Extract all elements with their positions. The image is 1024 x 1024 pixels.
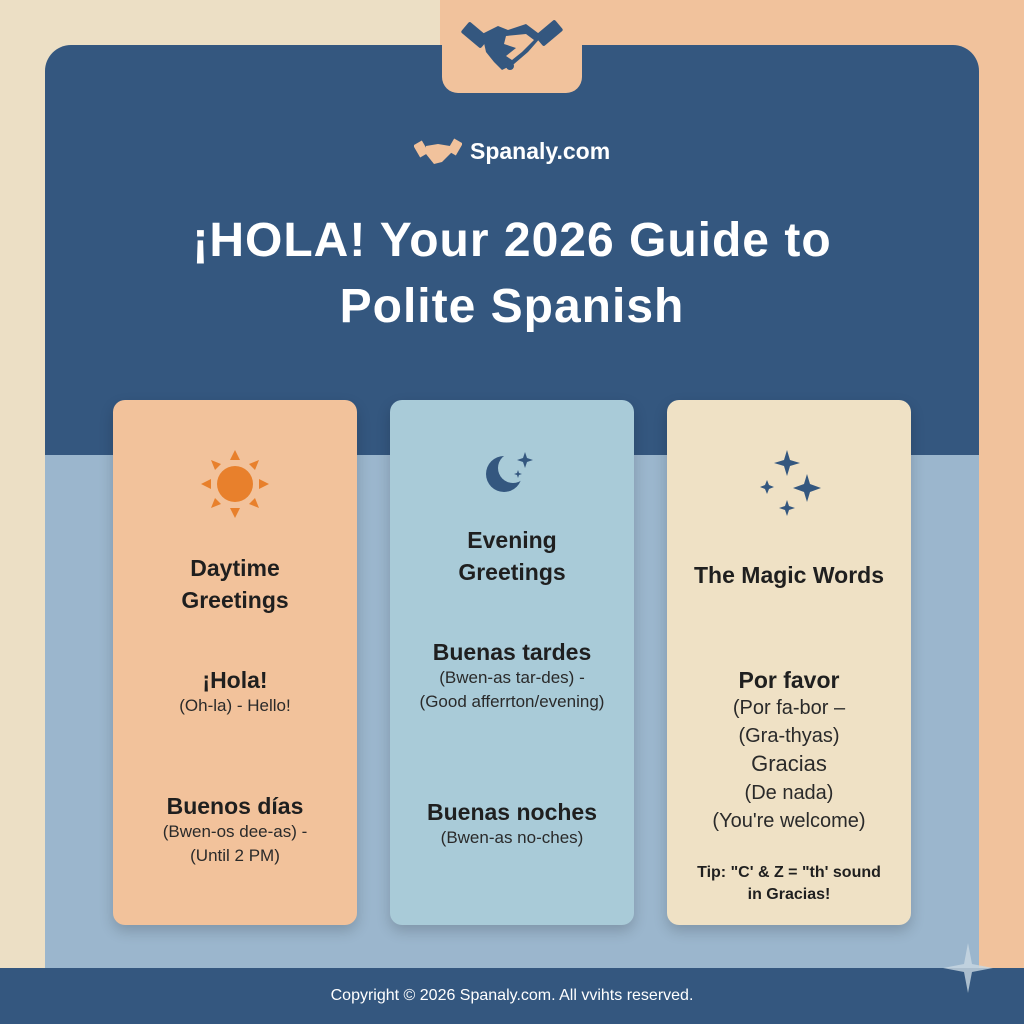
phrase: hola: (Oh-la) - Hello! <box>179 696 291 715</box>
phrase: buenas tardes: Buenas tardes <box>433 639 591 665</box>
phrase: buenas tardes: (Good afferrton/evening) <box>420 692 604 711</box>
phrases: (Gra-thyas) <box>738 725 840 747</box>
phrase: buenos dias <box>163 793 307 865</box>
background peach right <box>440 0 1024 968</box>
phrase: hola: ¡Hola! <box>202 667 268 693</box>
phrase: buenos dias: (Until 2 PM) <box>190 846 280 865</box>
icon: sparkles <box>760 450 821 516</box>
phrase: buenas noches: (Bwen-as no-ches) <box>441 828 583 847</box>
footer: Copyright © 2026 Spanaly.com. All vvihts reserved. <box>331 987 693 1004</box>
tip: Tip: "C' & Z = "th' sound <box>697 864 881 881</box>
card: magic words <box>667 400 911 925</box>
top icon tab: handshake <box>442 0 582 93</box>
heading: Greetings <box>458 559 566 585</box>
phrases <box>712 667 866 832</box>
heading: Greetings <box>181 587 289 613</box>
phrases: Por favor <box>738 667 839 693</box>
card: daytime greetings <box>113 400 357 925</box>
heading: Evening <box>467 527 557 553</box>
phrase: buenas tardes <box>420 639 604 711</box>
icon: moon <box>486 452 533 492</box>
footer <box>0 968 1024 1024</box>
icon: sun <box>201 450 269 518</box>
heading <box>181 555 289 613</box>
phrase: buenas noches: Buenas noches <box>427 799 597 825</box>
tip: in Gracias! <box>748 886 830 903</box>
phrases: (Por fa-bor – <box>733 697 845 719</box>
main dark blue header panel <box>45 45 979 455</box>
phrases: (You're welcome) <box>712 810 866 832</box>
title: Polite Spanish <box>340 280 684 333</box>
phrase: buenos dias: (Bwen-os dee-as) - <box>163 822 307 841</box>
title: ¡HOLA! Your 2026 Guide to <box>192 214 832 267</box>
logo: Spanaly.com: Spanaly.com <box>470 138 610 164</box>
phrase: buenos dias: Buenos días <box>167 793 303 819</box>
tip <box>697 864 881 903</box>
phrases: Gracias <box>751 751 827 776</box>
heading: Daytime <box>190 555 280 581</box>
phrase: buenas tardes: (Bwen-as tar-des) - <box>439 668 585 687</box>
heading: The Magic Words <box>694 562 884 588</box>
card: evening greetings <box>390 400 634 925</box>
phrase: buenas noches <box>427 799 597 847</box>
phrases: (De nada) <box>745 782 833 804</box>
lower light blue area <box>45 420 979 968</box>
decorative sparkle <box>943 944 993 993</box>
title <box>192 214 832 333</box>
phrase: hola <box>179 667 291 715</box>
heading <box>458 527 566 585</box>
